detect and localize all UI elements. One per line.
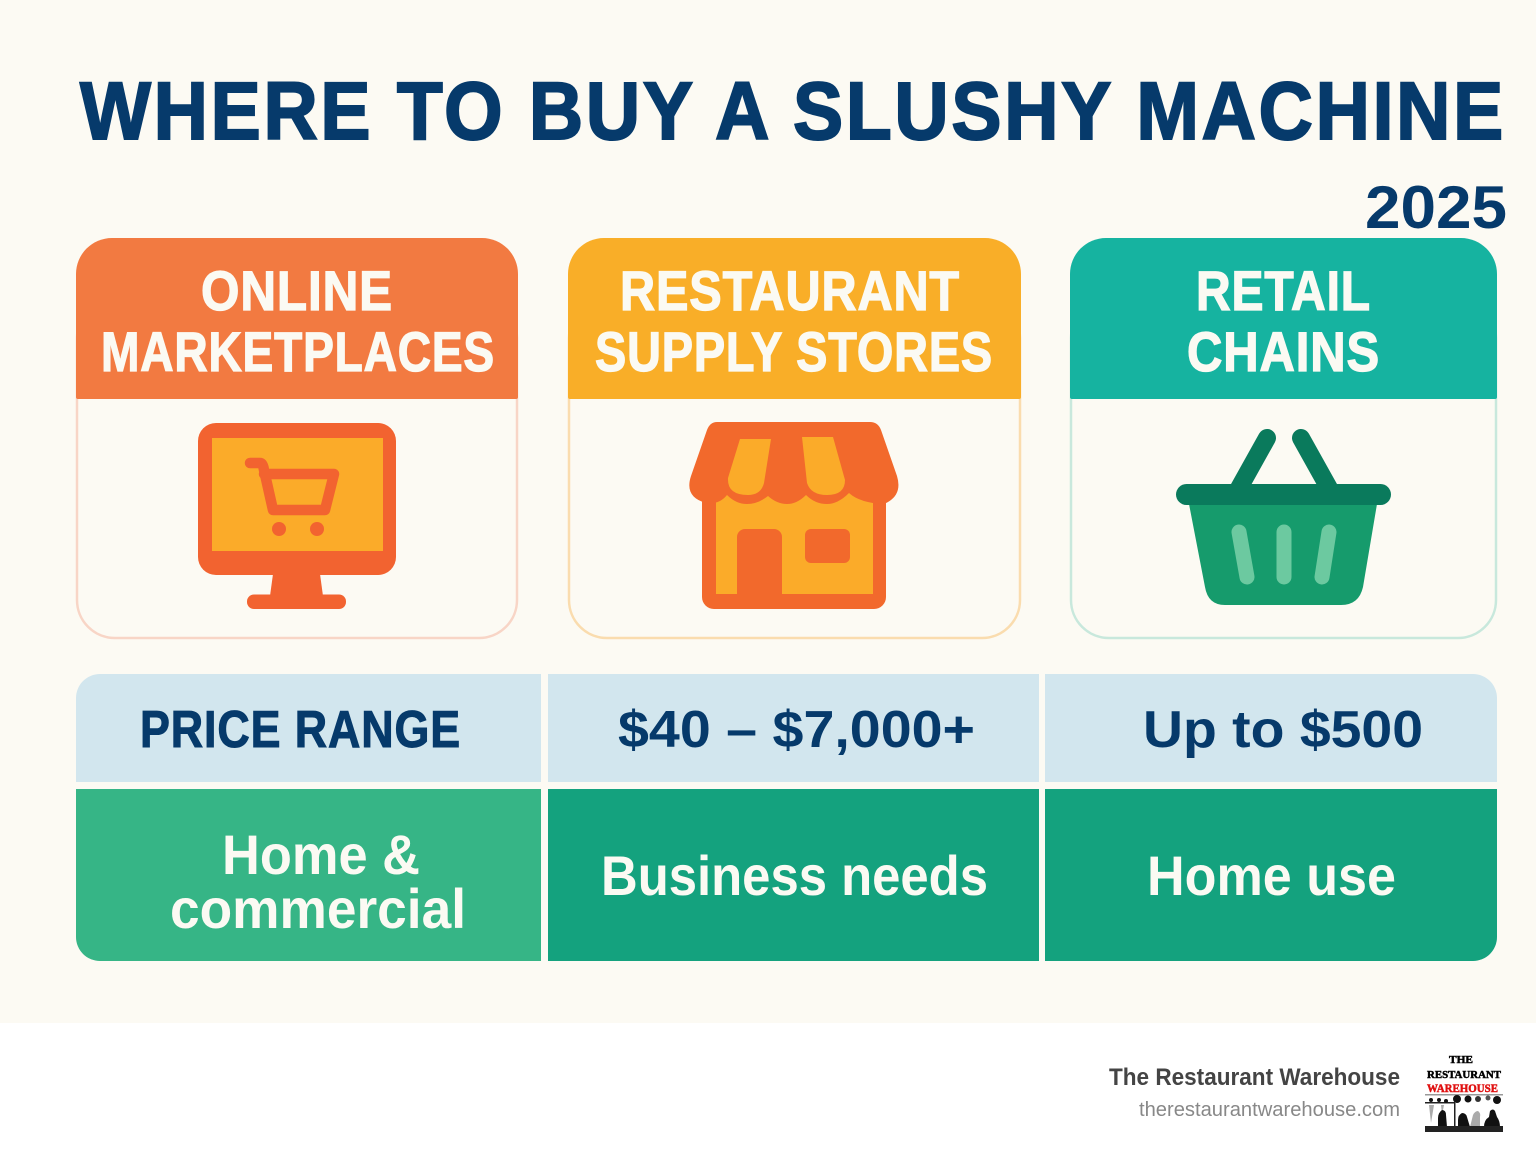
cell: home and commercial: commercial [170,877,466,940]
logo: the restaurant warehouse: WAREHOUSE [1427,1081,1498,1095]
header: retail chains: CHAINS [1187,320,1380,383]
cell: business needs [548,789,1039,961]
header: retail chains [1070,238,1497,399]
header: online marketplaces [76,238,518,399]
logo: the restaurant warehouse: THE [1449,1054,1473,1066]
cell: restaurant supply price [548,674,1039,782]
icon: shopping basket [1176,438,1391,605]
cell: restaurant supply price: $40 – $7,000+ [618,701,975,759]
header: online marketplaces: ONLINE [201,259,393,322]
cell: home use [1045,789,1497,961]
header: retail chains: RETAIL [1196,259,1371,322]
header: online marketplaces: MARKETPLACES [101,320,495,383]
cell: home use: Home use [1147,844,1396,907]
header: restaurant supply stores: SUPPLY STORES [595,320,993,383]
cell: home and commercial: Home & [222,823,420,886]
panel: retail chains [1070,238,1497,638]
icon: monitor with shopping cart [198,423,396,609]
footer brand name: The Restaurant Warehouse [1109,1064,1400,1091]
cell: home and commercial [76,789,541,961]
footer url: therestaurantwarehouse.com [1139,1099,1400,1121]
panel: online marketplaces [76,238,518,638]
logo: the restaurant warehouse [1425,1054,1503,1132]
icon: storefront [689,422,898,609]
cell: price range label: PRICE RANGE [140,701,461,759]
panel: restaurant supply stores [568,238,1021,638]
logo: the restaurant warehouse: RESTAURANT [1427,1069,1502,1081]
table row: best for [76,789,1497,961]
year: 2025 [1365,174,1507,241]
cell: retail price: Up to $500 [1143,701,1423,759]
header: restaurant supply stores: RESTAURANT [620,259,960,322]
cell: retail price [1045,674,1497,782]
cell: price range label [76,674,541,782]
cell: business needs: Business needs [601,844,988,907]
header: restaurant supply stores [568,238,1021,399]
table row: price range [76,674,1497,782]
